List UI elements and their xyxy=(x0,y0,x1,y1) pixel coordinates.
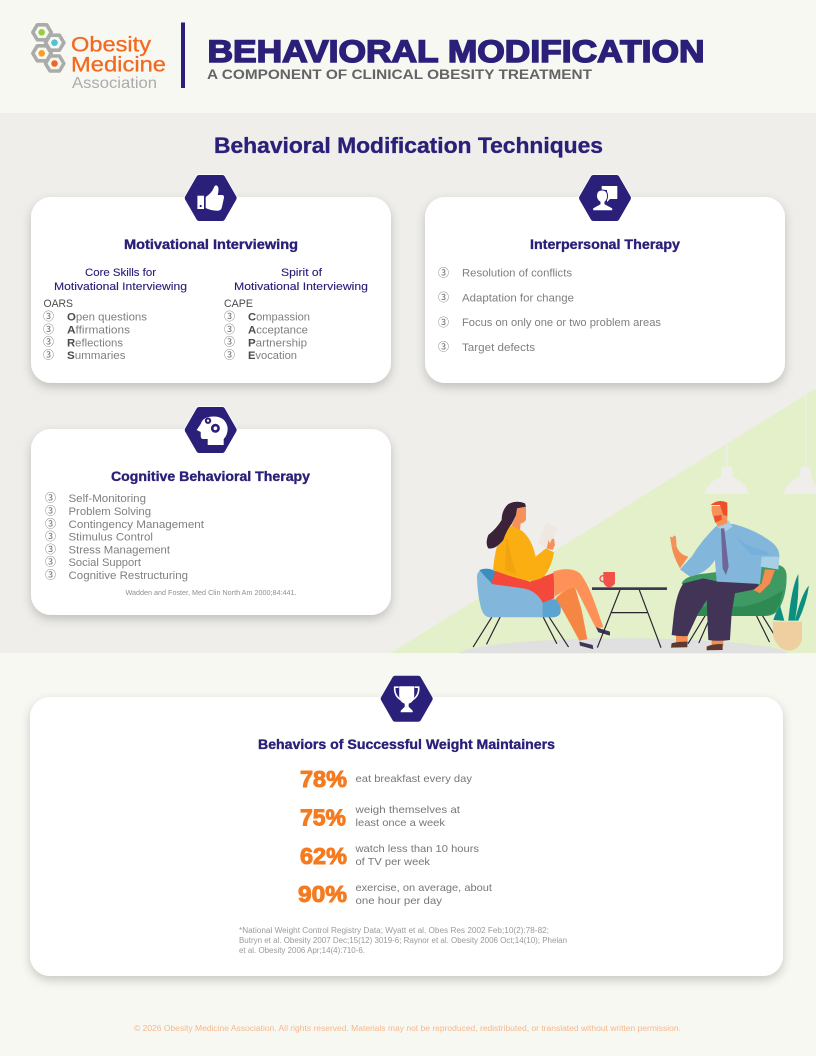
list: CBT items: ③ xyxy=(45,516,56,532)
stat: 90%: 90% xyxy=(298,881,347,907)
panel: motivational interviewing xyxy=(31,178,391,383)
column heading: core skills xyxy=(54,267,187,293)
citation: Wadden and Foster, Med Clin North Am 2000;84:441. xyxy=(126,590,297,597)
stat: 78%: eat breakfast every day xyxy=(356,773,473,785)
references xyxy=(239,926,567,955)
column heading: core skills: Motivational Interviewing xyxy=(54,281,187,293)
icon: thumbs up xyxy=(188,178,234,218)
main title: BEHAVIORAL MODIFICATION xyxy=(208,33,704,69)
list: CBT items: Contingency Management xyxy=(68,519,204,531)
header logo: Obesity xyxy=(71,32,151,56)
list: CAPE: ③ xyxy=(224,334,235,350)
stat: 62%: of TV per week xyxy=(356,856,431,868)
list: CBT items: Problem Solving xyxy=(68,506,151,518)
list: CBT items: ③ xyxy=(45,554,56,570)
list: CBT items: ③ xyxy=(45,502,56,518)
panel: interpersonal therapy xyxy=(425,178,785,383)
list: interpersonal items: ③ xyxy=(438,314,449,330)
stat: 75%: 75% xyxy=(300,804,346,830)
heading: Interpersonal Therapy xyxy=(530,237,681,252)
list: interpersonal items: Target defects xyxy=(462,342,536,354)
icon: head with gears xyxy=(188,410,234,450)
stat: 78%: 78% xyxy=(300,766,347,792)
list: CBT items: Self-Monitoring xyxy=(68,493,146,505)
stat: 62%: watch less than 10 hours xyxy=(354,843,479,855)
list: CAPE xyxy=(224,298,310,362)
column heading: spirit: Spirit of xyxy=(281,267,323,279)
references: et al. Obesity 2006 Apr;14(4):710-6. xyxy=(239,946,365,955)
list: CAPE: Evocation xyxy=(248,350,297,362)
list: interpersonal items: Adaptation for change xyxy=(462,292,574,304)
list: OARS xyxy=(43,298,148,362)
panel: successful weight maintainers xyxy=(30,679,783,976)
section heading: Behavioral Modification Techniques xyxy=(214,133,603,158)
list: CBT items: ③ xyxy=(45,566,56,582)
list: CAPE: Partnership xyxy=(248,338,307,350)
stat: 62% xyxy=(300,843,479,869)
references: Butryn et al. Obesity 2007 Dec;15(12) 3019-6; Raynor et al. Obesity 2006 Oct;14(10); Phelan xyxy=(239,936,567,945)
list: OARS: ③ xyxy=(43,334,54,350)
stat: 90%: exercise, on average, about xyxy=(356,882,492,894)
icon: trophy xyxy=(384,679,430,719)
list: OARS: Reflections xyxy=(67,338,124,350)
list: CBT items xyxy=(45,490,204,582)
header divider xyxy=(181,22,185,88)
list: interpersonal items: Focus on only one or two problem areas xyxy=(462,317,661,329)
heading: Behaviors of Successful Weight Maintainers xyxy=(258,737,555,752)
illustration: therapy session xyxy=(390,388,816,672)
list: CAPE: ③ xyxy=(224,321,235,337)
stat: 75%: weigh themselves at xyxy=(354,804,460,816)
list: CBT items: Stress Management xyxy=(68,544,170,556)
stat: 75%: least once a week xyxy=(356,817,446,829)
list: OARS: ③ xyxy=(43,308,54,324)
list: OARS: ③ xyxy=(43,321,54,337)
list: CBT items: Cognitive Restructuring xyxy=(68,570,188,582)
header logo: Medicine xyxy=(71,52,166,76)
list: interpersonal items: Resolution of conflicts xyxy=(462,268,573,280)
list: OARS: Summaries xyxy=(67,350,126,362)
list: CBT items: Social Support xyxy=(68,557,141,569)
list: CAPE: CAPE xyxy=(224,298,253,310)
list: CBT items: ③ xyxy=(45,541,56,557)
stat: 90%: one hour per day xyxy=(356,895,443,907)
header logo xyxy=(33,25,166,92)
stat: 75% xyxy=(300,804,460,830)
column heading: core skills: Core Skills for xyxy=(85,267,156,279)
list: CAPE: ③ xyxy=(224,346,235,362)
list: OARS: Open questions xyxy=(67,312,148,324)
list: CBT items: ③ xyxy=(45,528,56,544)
subtitle: A COMPONENT OF CLINICAL OBESITY TREATMENT xyxy=(207,66,592,82)
icon: person with speech bubble xyxy=(582,178,628,218)
list: CBT items: Stimulus Control xyxy=(68,532,153,544)
list: interpersonal items: ③ xyxy=(438,338,449,354)
list: OARS: OARS xyxy=(44,298,73,310)
stat: 90% xyxy=(298,881,492,907)
references: *National Weight Control Registry Data; Wyatt et al. Obes Res 2002 Feb;10(2):78-82; xyxy=(239,926,549,935)
header logo: Association xyxy=(72,75,157,92)
stat: 62%: 62% xyxy=(300,843,347,869)
footer copyright: © 2026 Obesity Medicine Association. All rights reserved. Materials may not be reproduced, redistributed, or translated without written permission. xyxy=(134,1024,681,1033)
heading: Motivational Interviewing xyxy=(124,237,298,252)
stat: 78% xyxy=(300,766,473,792)
heading: Cognitive Behavioral Therapy xyxy=(111,469,310,484)
list: interpersonal items: ③ xyxy=(438,289,449,305)
list: CAPE: ③ xyxy=(224,308,235,324)
list: CAPE: Acceptance xyxy=(248,324,308,336)
list: OARS: Affirmations xyxy=(67,324,131,336)
column heading: spirit: Motivational Interviewing xyxy=(234,281,368,293)
list: CAPE: Compassion xyxy=(248,312,310,324)
column heading: spirit xyxy=(234,267,368,293)
list: interpersonal items xyxy=(438,264,661,354)
list: interpersonal items: ③ xyxy=(438,264,449,280)
panel: cognitive behavioral therapy xyxy=(31,410,391,615)
list: CBT items: ③ xyxy=(45,490,56,506)
list: OARS: ③ xyxy=(43,346,54,362)
